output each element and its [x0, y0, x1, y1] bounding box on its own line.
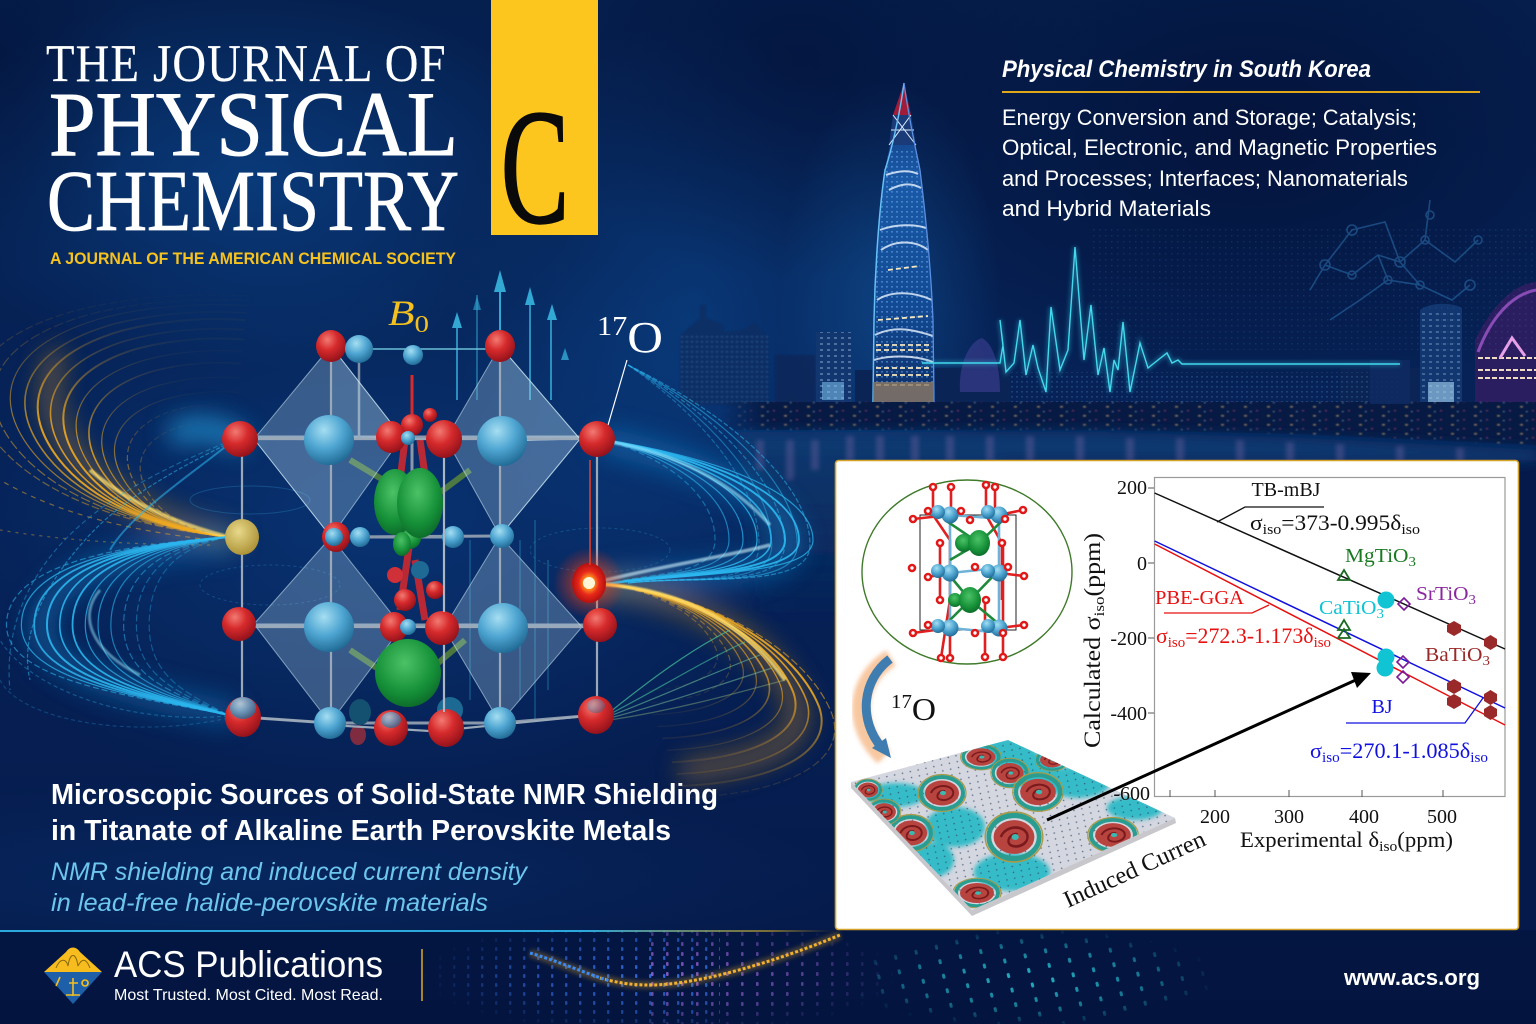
TB-mBJ label: =373-0.995δ: [1281, 510, 1401, 535]
B0 label: B: [388, 293, 410, 333]
background rings behind crystal: [190, 486, 670, 605]
right dome building: [1475, 282, 1536, 410]
O atoms: [909, 482, 1027, 661]
gold marked atom: [225, 519, 259, 555]
article subtitle: in lead-free halide-perovskite materials: [51, 889, 488, 917]
PBE-GGA label: PBE-GGA: [1155, 587, 1245, 609]
BJ label: =270.1-1.085δ: [1340, 738, 1470, 763]
x axis title: (ppm): [1397, 827, 1453, 852]
x axis tick labels: [1200, 806, 1457, 828]
website: www.acs.org: [1343, 965, 1480, 990]
lotte tower: [873, 83, 934, 404]
BJ label: [1310, 696, 1488, 766]
glowing 17O atom: [553, 460, 625, 619]
y axis tick labels: 0: [1137, 553, 1147, 575]
TB-mBJ label: iso: [1263, 522, 1281, 538]
special issue heading: Physical Chemistry in South Korea: [1002, 56, 1371, 83]
low silhouette: [855, 345, 1420, 405]
17O label and leader line: [597, 311, 663, 432]
journal section C block: C: [501, 77, 569, 258]
y axis tick labels: 200: [1117, 477, 1147, 499]
induced current density map: [850, 738, 1180, 916]
y axis tick labels: -200: [1110, 628, 1147, 650]
back atoms and inner bonds: [239, 349, 600, 745]
y axis title: iso: [1092, 597, 1108, 616]
x axis tick labels: 300: [1274, 806, 1304, 828]
shoreline lights: [720, 402, 1536, 445]
SrTiO3 series: 3: [1469, 593, 1476, 608]
upper left gold field lines: [0, 295, 251, 545]
TB-mBJ label: σ: [1250, 510, 1262, 535]
article subtitle: NMR shielding and induced current density: [51, 858, 528, 886]
unit cell frame bonds: [239, 360, 600, 732]
perovskite crystal structure: [222, 330, 625, 747]
-600 axis label: -600: [1113, 783, 1150, 805]
curved arrow: [861, 658, 891, 758]
upper right blue field lines: [598, 365, 813, 584]
footer divider line: [0, 930, 835, 932]
PBE-GGA label: σ: [1156, 623, 1168, 648]
NMR spectrum line: [922, 247, 1400, 392]
CaTiO3 series: 3: [1377, 607, 1384, 622]
topics list: and Processes; Interfaces; Nanomaterials: [1002, 166, 1408, 191]
octahedra: [254, 346, 582, 723]
BJ label: σ: [1310, 738, 1322, 763]
titanium atoms: [230, 335, 605, 739]
BJ label: iso: [1322, 750, 1340, 766]
calcium atoms: [374, 468, 443, 707]
journal title: PHYSICAL: [49, 73, 458, 175]
field glow underlay: [40, 360, 798, 770]
17O label and leader line: O: [627, 313, 663, 362]
journal subtitle: A JOURNAL OF THE AMERICAN CHEMICAL SOCIETY: [50, 250, 456, 268]
inset: crystal unit cell: [862, 480, 1072, 664]
ACS Publications wordmark: ACS Publications: [114, 944, 383, 985]
footer vertical divider: [421, 949, 423, 1001]
topics list: and Hybrid Materials: [1002, 196, 1211, 221]
fit lines: [1155, 493, 1505, 725]
article title: Microscopic Sources of Solid-State NMR Shielding: [51, 779, 718, 811]
plot frame: [1154, 478, 1505, 796]
PBE-GGA label: [1155, 587, 1331, 651]
front atoms: [426, 420, 462, 458]
panel: graphical abstract: [836, 460, 1518, 930]
CaTiO3 series: [1319, 592, 1394, 676]
y axis title: (ppm): [1080, 533, 1105, 597]
magnetic field B0 arrows: [452, 270, 569, 720]
article subtitle: [51, 858, 528, 917]
city skyline: [680, 83, 1536, 445]
x axis title: iso: [1379, 839, 1397, 855]
PBE-GGA label: iso: [1314, 635, 1331, 651]
TB-mBJ label: TB-mBJ: [1252, 479, 1321, 501]
CaTiO3 series: CaTiO: [1319, 597, 1373, 619]
BJ label: BJ: [1371, 696, 1393, 718]
induced current label: Induced Curren: [1060, 826, 1210, 913]
journal section C block: [491, 0, 598, 258]
17O inset label: 17: [891, 691, 912, 713]
journal title: [46, 34, 459, 249]
journal title: THE JOURNAL OF: [46, 34, 446, 93]
Ca atoms: [948, 530, 990, 613]
far buildings left: [680, 305, 815, 405]
river water: [735, 432, 1536, 620]
y axis tick labels: [1110, 477, 1147, 725]
17O inset label: O: [912, 691, 936, 727]
MgTiO3 series: MgTiO: [1345, 545, 1404, 567]
bonds: [913, 485, 1024, 658]
Ti atoms: [931, 505, 1008, 636]
BaTiO3 series: BaTiO: [1425, 644, 1479, 666]
y axis tick labels: -400: [1110, 703, 1147, 725]
topics list: Optical, Electronic, and Magnetic Properties: [1002, 135, 1437, 160]
x axis tick labels: 400: [1349, 806, 1379, 828]
footer dotted wave: [420, 930, 1240, 1024]
x axis title: Experimental δ: [1240, 827, 1374, 852]
magnetic field lines: [0, 295, 835, 798]
ACS Publications wordmark: [114, 944, 383, 1004]
ACS Publications wordmark: Most Trusted. Most Cited. Most Read.: [114, 987, 383, 1004]
17O label and leader line: 17: [597, 311, 627, 341]
lower left blue field lines: [0, 443, 228, 727]
axis ticks: [1148, 488, 1443, 797]
SrTiO3 series: [1397, 583, 1476, 683]
x axis tick labels: 200: [1200, 806, 1230, 828]
BaTiO3 series: 3: [1483, 654, 1490, 669]
article title: [51, 779, 718, 847]
y axis title: Calculated σ: [1080, 632, 1105, 748]
journal title: CHEMISTRY: [47, 152, 459, 249]
black arrow to data point: [1047, 672, 1371, 820]
background data grid and molecular network: [1090, 200, 1536, 350]
lower right gold field lines: [600, 584, 835, 798]
PBE-GGA label: =272.3-1.173δ: [1185, 623, 1314, 648]
oxygen atoms: [222, 330, 617, 746]
NMR correlation chart: [1080, 477, 1505, 855]
article title: in Titanate of Alkaline Earth Perovskite Metals: [51, 815, 671, 847]
topics list: Energy Conversion and Storage; Catalysis;: [1002, 105, 1417, 130]
MgTiO3 series: 3: [1409, 555, 1416, 570]
PBE-GGA label: iso: [1168, 635, 1185, 651]
BaTiO3 series: [1425, 621, 1497, 720]
right tower: [1420, 304, 1462, 405]
BJ label: iso: [1470, 750, 1488, 766]
x axis tick labels: 500: [1427, 806, 1457, 828]
MgTiO3 series: [1338, 545, 1416, 638]
TB-mBJ label: iso: [1401, 522, 1420, 538]
B0 label: 0: [415, 312, 429, 338]
TB-mBJ label: [1217, 479, 1420, 538]
topics list: [1002, 105, 1437, 221]
ACS logo: [44, 948, 102, 1004]
SrTiO3 series: SrTiO: [1416, 583, 1465, 605]
building with lit windows: [816, 332, 852, 402]
